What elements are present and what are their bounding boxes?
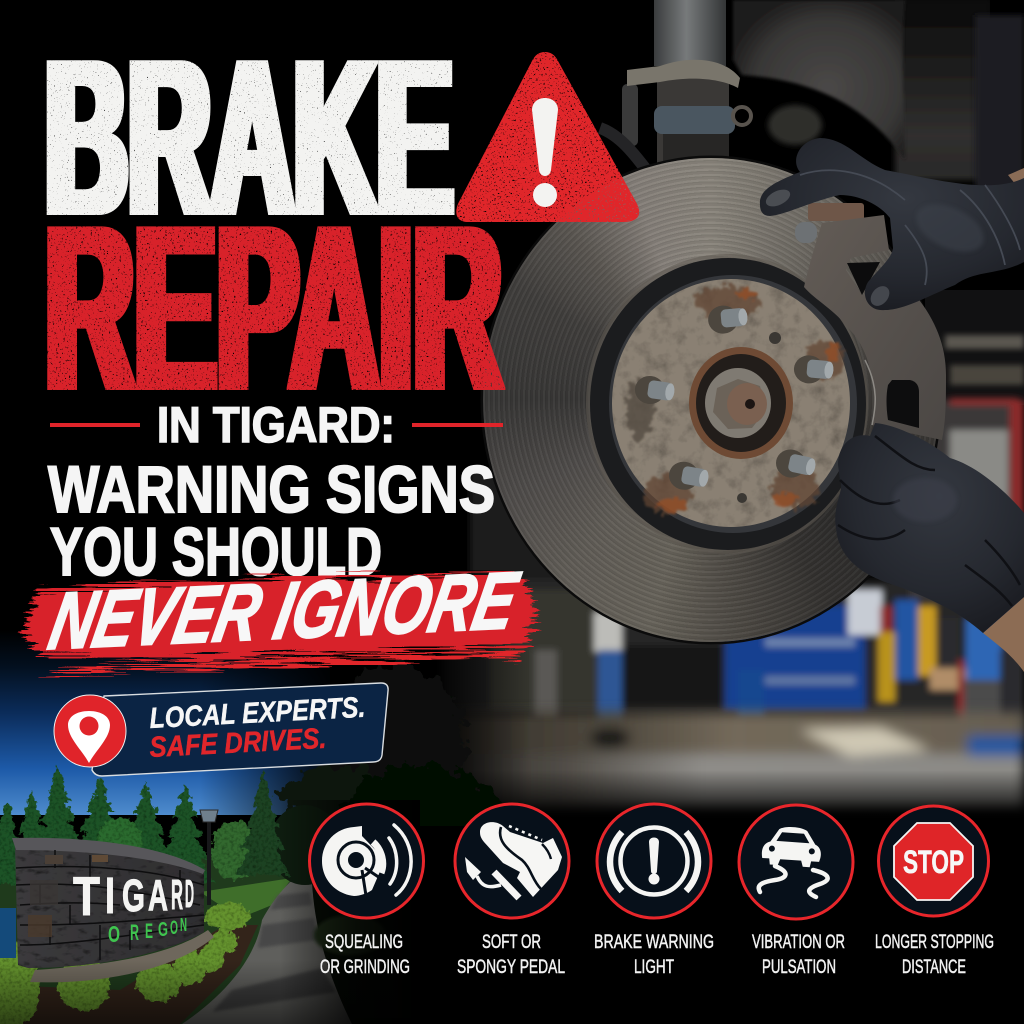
Tigard sign lettering xyxy=(73,865,194,947)
bushes xyxy=(0,903,251,1024)
icon: location pin xyxy=(54,695,126,767)
subheading: IN TIGARD with rules: IN TIGARD: xyxy=(157,397,395,453)
label: soft or spongy pedal xyxy=(457,931,565,978)
Tigard sign lettering: I xyxy=(105,867,115,924)
subheading: warning signs: YOU SHOULD xyxy=(50,514,382,590)
badge: local experts, safe drives xyxy=(54,683,388,776)
park ground: lawn, mulch, walkway xyxy=(0,805,560,1024)
label: squealing or grinding: SQUEALING xyxy=(325,931,403,953)
lower glove hand xyxy=(835,423,1024,672)
sky gradient xyxy=(0,630,340,815)
rotor hat and hub xyxy=(586,254,868,554)
dark deciduous tree silhouette xyxy=(283,664,505,875)
subheading: warning signs: WARNING SIGNS xyxy=(48,452,495,526)
Tigard sign lettering: R xyxy=(130,920,139,945)
icon: longer stopping distance: STOP xyxy=(903,844,964,880)
Tigard sign lettering: G xyxy=(122,870,145,921)
label: squealing or grinding: OR GRINDING xyxy=(320,956,410,978)
heading line 2: REPAIR: REPAIR xyxy=(45,176,502,439)
badge: local experts, safe drives: LOCAL EXPERTS. xyxy=(149,692,366,735)
label: longer stopping distance xyxy=(875,931,994,978)
wheel studs xyxy=(707,304,749,335)
label: soft or spongy pedal: SPONGY PEDAL xyxy=(457,956,565,978)
Tigard sign lettering: O xyxy=(170,918,178,939)
hub plate xyxy=(612,279,850,527)
Tigard sign lettering: O xyxy=(108,921,120,947)
icon: vibration or pulsation xyxy=(739,805,853,919)
lower park vignette xyxy=(0,800,600,1024)
brush banner: never ignore xyxy=(22,555,538,675)
suspension strut xyxy=(600,0,751,172)
Tigard sign lettering: T xyxy=(73,865,100,927)
subheading: IN TIGARD with rules xyxy=(50,397,503,453)
Tigard stone sign xyxy=(0,838,214,982)
label: vibration or pulsation: VIBRATION OR xyxy=(752,931,845,953)
wheel well background xyxy=(733,0,1024,405)
label: vibration or pulsation xyxy=(752,931,845,978)
rust patches xyxy=(626,286,845,515)
label: brake warning light: BRAKE WARNING xyxy=(594,931,714,953)
Tigard sign lettering: R xyxy=(171,871,183,918)
Tigard sign lettering: E xyxy=(145,920,153,943)
subheading: warning signs xyxy=(48,452,495,590)
label: longer stopping distance: DISTANCE xyxy=(902,956,966,978)
brush banner: never ignore: NEVER IGNORE xyxy=(42,555,526,667)
lamp post xyxy=(200,810,218,905)
centre bearing ring xyxy=(689,347,793,459)
Tigard sign lettering: G xyxy=(158,919,168,941)
background photo: workshop, sky and Tigard park: D xyxy=(185,873,194,916)
label: squealing or grinding xyxy=(320,931,410,978)
heading line 1: BRAKE: BRAKE xyxy=(45,14,453,262)
conifer tree line xyxy=(0,765,290,885)
icon: squealing or grinding xyxy=(310,804,424,918)
label: brake warning light xyxy=(594,931,714,978)
icon: longer stopping distance xyxy=(878,806,988,916)
badge: local experts, safe drives: SAFE DRIVES. xyxy=(149,723,327,764)
label: soft or spongy pedal: SOFT OR xyxy=(482,931,541,953)
icon: soft or spongy pedal xyxy=(455,804,569,918)
label: brake warning light: LIGHT xyxy=(634,956,674,978)
workshop fade to black xyxy=(400,570,1024,1024)
icon: brake warning light xyxy=(597,804,711,918)
workshop floor with light reflection xyxy=(440,712,1024,810)
icon: warning triangle xyxy=(456,52,639,222)
brake disc rotor xyxy=(483,158,939,642)
caliper bracket and brake pad xyxy=(795,203,946,440)
label: vibration or pulsation: PULSATION xyxy=(762,956,836,978)
Tigard sign lettering: A xyxy=(148,871,168,920)
Tigard sign lettering: N xyxy=(180,915,187,935)
blurred workshop background with blue equipment xyxy=(440,398,1024,740)
upper glove hand xyxy=(760,138,1024,310)
